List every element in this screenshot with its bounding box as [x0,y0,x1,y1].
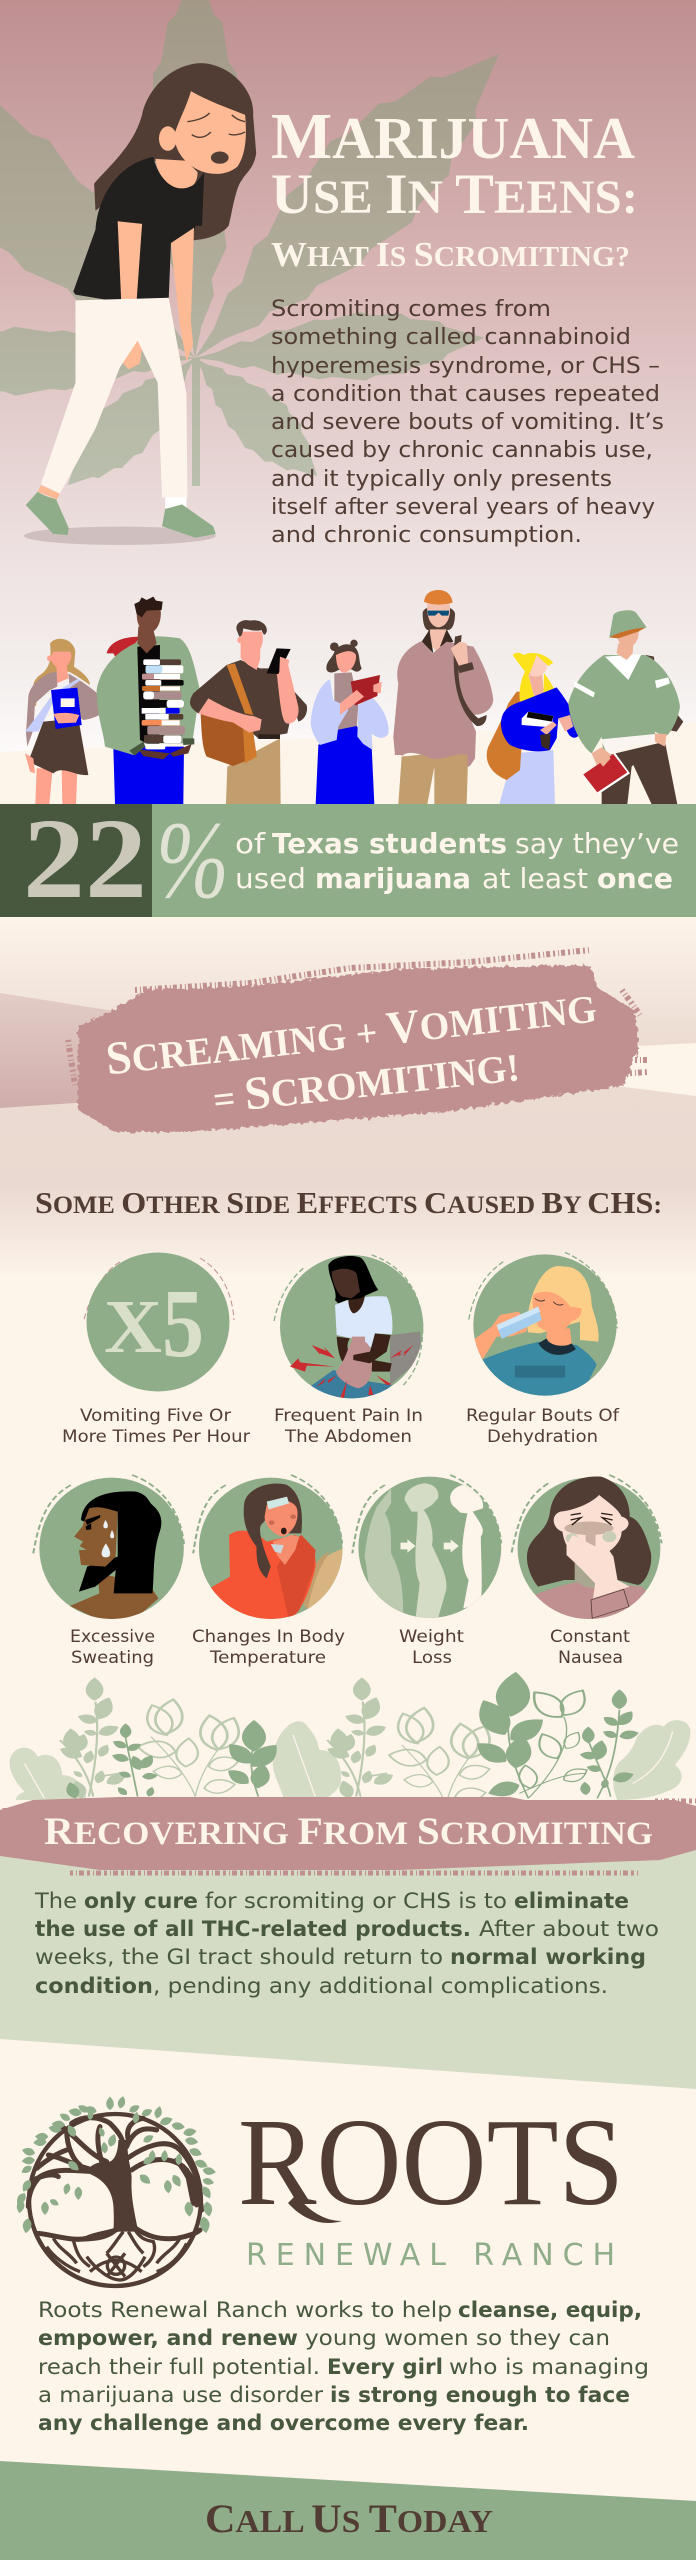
title: WHAT IS SCROMITING? [271,235,630,274]
stat text: of [235,827,266,860]
about text block: a marijuana use disorder [38,2383,323,2408]
intro text block: a condition that causes repeated [271,382,660,407]
student 2: man carrying stack of books [97,597,200,804]
icon: weight loss silhouettes [352,1475,501,1618]
intro text block: something called cannabinoid [271,325,631,350]
side effect labels: The Abdomen [284,1427,412,1447]
cannabis leaf watermark [0,0,540,506]
brush banner: scromiting formula [68,950,650,1135]
illustration: sick teen girl [24,63,256,545]
recovering text block: weeks, the GI tract should return to [35,1945,443,1970]
about text block: young women so they can [305,2326,610,2351]
icon: body temperature [193,1475,344,1620]
side effect: vomiting x5 icon: X [104,1285,162,1369]
stat number: 22%: % [156,799,229,921]
about text block: who is managing [449,2355,649,2380]
intro text block: and severe bouts of vomiting. It’s [271,410,664,435]
stat text: used [235,862,306,895]
recovering text block [34,1889,659,1999]
recovering text block: the use of all THC-related products. [35,1917,471,1942]
intro text block: hyperemesis syndrome, or CHS – [271,354,660,379]
panel: recovering section background [0,1850,696,2089]
about text block [38,2298,649,2436]
side effect icons, row 2 [33,1475,662,1620]
student 4: girl reading red book [311,640,389,804]
about text block: Every girl [327,2355,443,2380]
about text block: cleanse, equip, [458,2298,642,2323]
side effect icons, row 1 [274,1252,617,1402]
stat number: 22%: 22 [23,795,147,922]
illustration: group of students (right) [311,590,683,804]
stat text: Texas students [272,827,507,860]
student 7: man in bucket hat with red book [568,610,683,804]
title: MARIJUANA [271,100,635,173]
logo wordmark: RENEWAL RANCH [246,2238,615,2273]
recovering text block: normal working [450,1945,646,1970]
icon: sweating [33,1475,184,1620]
intro text block [271,297,664,548]
student 6: girl with yellow hair [487,653,581,804]
side effect labels: Vomiting Five Or [80,1406,231,1426]
side effect labels: Excessive [70,1627,155,1647]
banner text: SCREAMING + VOMITING [103,981,599,1085]
about text block: is strong enough to face [330,2383,630,2408]
recovering text block: , pending any additional complications. [153,1974,608,1999]
recovering text block: condition [35,1974,153,1999]
stat text: marijuana [315,862,471,895]
icon: abdominal pain [274,1255,423,1402]
side effect: vomiting x5 icon [84,1252,234,1392]
side effect labels: Temperature [209,1648,326,1668]
banner text [103,981,604,1135]
side effect labels: Dehydration [487,1427,598,1447]
side effect: vomiting x5 icon: 5 [162,1270,204,1378]
background: cream lower body [0,1276,696,2560]
call to action: CALL US TODAY [205,2496,493,2541]
title: USE IN TEENS: [271,163,638,226]
stat text [235,827,679,895]
section heading: side effects: SOME OTHER SIDE EFFECTS CAUSED BY CHS: [35,1185,662,1220]
background: cream ground behind students [0,722,696,820]
panel: footer [0,2461,696,2560]
background: hero gradient [0,0,696,760]
intro text block: caused by chronic cannabis use, [271,438,653,463]
side effect labels: Constant [550,1627,630,1647]
logo wordmark: ROOTS [238,2094,624,2232]
recovering text block: The [34,1889,77,1914]
student 1: girl with blue notebook [25,639,107,804]
banner text: = SCROMITING! [210,1039,522,1124]
side effect labels: Frequent Pain In [274,1406,423,1426]
background wedges behind brush [0,993,696,1108]
side effect labels: Changes In Body [192,1627,345,1647]
side effect labels: Regular Bouts Of [466,1406,620,1426]
recovering text block: After about two [479,1917,659,1942]
intro text block: and chronic consumption. [271,523,582,548]
logo: tree of life [14,2095,216,2286]
about text block: empower, and renew [38,2326,298,2351]
recovering text block: eliminate [514,1889,629,1914]
brush banner: recovering heading [0,1797,696,1873]
about text block: reach their full potential. [38,2355,320,2380]
stat text: say they’ve [515,827,679,860]
side effect labels: Loss [412,1648,452,1668]
stat text: at least [482,862,588,895]
about text block: Roots Renewal Ranch works to help [38,2298,452,2323]
background: mid section gradient [0,917,696,1277]
side effect labels: More Times Per Hour [62,1427,250,1447]
recovering text block: for scromiting or CHS is to [205,1889,507,1914]
icon: nausea [511,1475,662,1620]
stat band [0,795,696,922]
stat text: once [597,862,673,895]
title [271,100,638,274]
student 3: man with phone and satchel [190,620,307,804]
about text block: any challenge and overcome every fear. [38,2411,529,2436]
intro text block: and it typically only presents [271,467,612,492]
side effect labels: Nausea [558,1648,623,1668]
side effect labels [62,1406,630,1668]
side effect labels: Sweating [71,1648,154,1668]
illustration: group of students (left) [25,597,307,804]
side effect labels: Weight [399,1627,464,1647]
student 5: tall man with beanie and sunglasses [393,590,493,804]
intro text block: Scromiting comes from [271,297,551,322]
stat number: 22% [23,795,229,922]
botanical border [10,1671,690,1805]
recovering text block: only cure [84,1889,198,1914]
intro text block: itself after several years of heavy [271,495,655,520]
brush banner: recovering heading: RECOVERING FROM SCROMITING [44,1810,653,1853]
icon: dehydration [468,1252,617,1398]
